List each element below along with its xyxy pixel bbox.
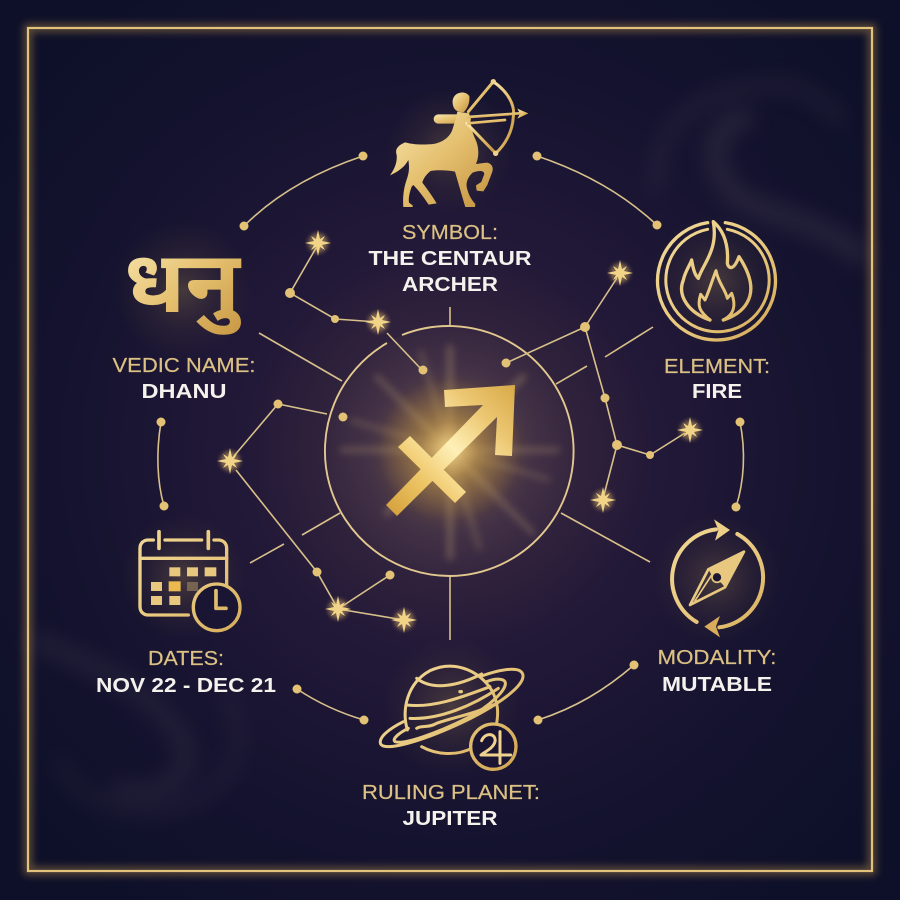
- label: element: FIRE: [692, 381, 742, 403]
- label: dates: DATES:: [148, 648, 224, 670]
- label: ruling planet: [362, 782, 540, 830]
- icon: Devanagari name Dhanu: धनु: [124, 236, 242, 348]
- label: element: ELEMENT:: [664, 356, 770, 378]
- icon: calendar and clock: [120, 513, 247, 640]
- icon: mutable modality compass: [652, 513, 782, 643]
- label: element: [664, 356, 770, 403]
- label: symbol: ARCHER: [402, 274, 499, 296]
- connector arcs between icons: [156, 152, 744, 724]
- nebula swirl: top right: [656, 85, 860, 255]
- label: modality: [658, 647, 776, 696]
- label: dates: [96, 648, 276, 697]
- label: ruling planet: RULING PLANET:: [362, 782, 540, 804]
- central glow: [245, 245, 655, 655]
- label: modality: MUTABLE: [662, 674, 772, 696]
- icon: Jupiter planet: [380, 637, 523, 777]
- label: symbol: SYMBOL:: [402, 222, 498, 244]
- label: symbol: THE CENTAUR: [368, 248, 532, 270]
- central medallion: [325, 326, 575, 576]
- icon: Jupiter symbol: [481, 732, 511, 763]
- label: vedic name: DHANU: [142, 381, 226, 403]
- constellation: left: [217, 400, 417, 633]
- nebula swirl: bottom left: [35, 640, 239, 812]
- Sagittarius sign: [386, 385, 515, 516]
- light rays: [340, 345, 560, 560]
- icon: centaur archer: [387, 79, 528, 213]
- spokes around medallion: [250, 307, 653, 640]
- icon: Devanagari name Dhanu: [113, 220, 253, 360]
- constellation: right: [502, 260, 703, 513]
- label: vedic name: VEDIC NAME:: [112, 355, 256, 377]
- label: symbol: [368, 222, 532, 296]
- label: vedic name: [112, 355, 256, 403]
- constellation: upper left: [285, 230, 428, 374]
- label: ruling planet: JUPITER: [402, 808, 498, 830]
- label: dates: NOV 22 - DEC 21: [96, 675, 276, 697]
- label: modality: MODALITY:: [658, 647, 776, 669]
- icon: fire element: [650, 213, 784, 347]
